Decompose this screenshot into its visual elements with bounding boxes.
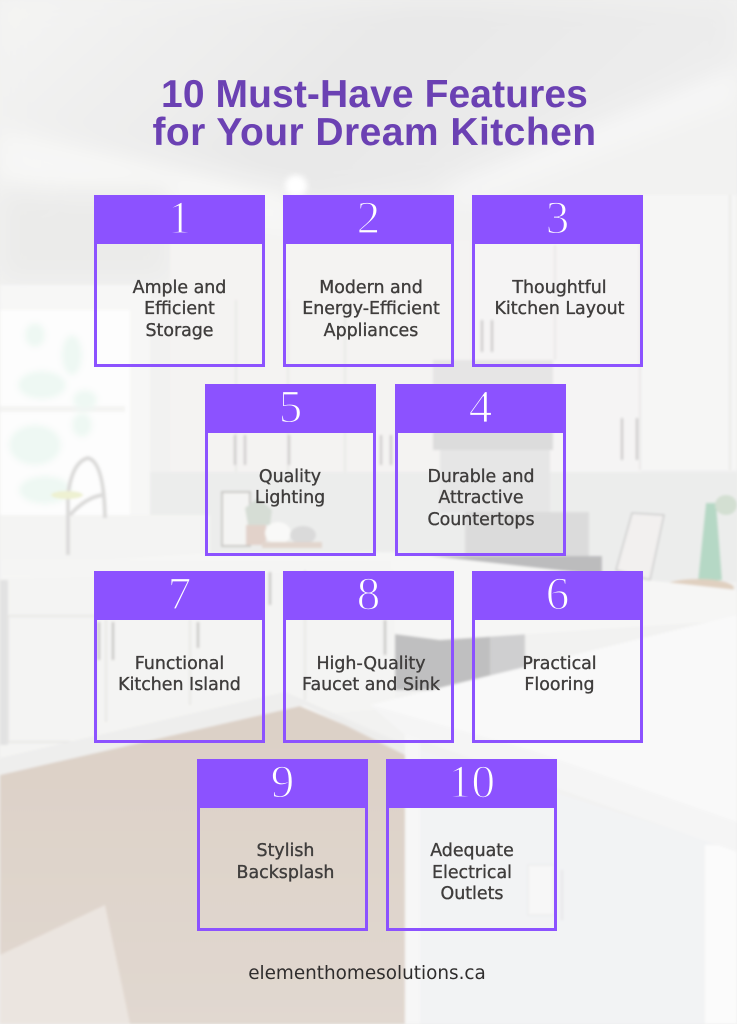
card 4: Durable and Attractive Countertops (395, 384, 566, 556)
card 9: Stylish Backsplash: Backsplash (237, 862, 334, 882)
card 5: Quality Lighting: Lighting (255, 488, 325, 508)
card 3: Thoughtful Kitchen Layout (472, 195, 643, 367)
card 6: Practical Flooring (472, 571, 643, 743)
upper cabinets (170, 240, 470, 472)
card 10: Adequate Electrical Outlets: Outlets (441, 884, 503, 904)
window (0, 285, 150, 550)
card 6: Practical Flooring: Practical (522, 654, 597, 674)
card 3: Thoughtful Kitchen Layout: Kitchen Layout (494, 299, 624, 319)
card 7: Functional Kitchen Island: Functional (135, 654, 224, 674)
card 9: Stylish Backsplash (197, 759, 368, 931)
card 4: Durable and Attractive Countertops: Countertops (427, 510, 535, 530)
card 1: Ample and Efficient Storage: Efficient (144, 299, 215, 319)
card 1: Ample and Efficient Storage (94, 195, 265, 367)
lower counter (0, 552, 737, 640)
card 8: High-Quality Faucet and Sink: High-Quality (316, 654, 426, 674)
card 2: Modern and Energy-Efficient Appliances: Appliances (324, 320, 418, 340)
card 1: Ample and Efficient Storage: 1 (168, 192, 191, 244)
items right (616, 513, 664, 580)
card 10: Adequate Electrical Outlets: 10 (448, 756, 495, 808)
card 3: Thoughtful Kitchen Layout: Thoughtful (512, 278, 607, 298)
card 2: Modern and Energy-Efficient Appliances: Energy-Efficient (302, 299, 440, 319)
faucet (68, 458, 105, 555)
card 4: Durable and Attractive Countertops: Durable and (427, 466, 535, 486)
card 9: Stylish Backsplash: 9 (271, 756, 294, 808)
card 5: Quality Lighting (205, 384, 376, 556)
floor reflection (0, 905, 130, 1024)
card 1: Ample and Efficient Storage: Ample and (133, 278, 226, 298)
card 8: High-Quality Faucet and Sink: Faucet and Sink (302, 675, 440, 695)
card 9: Stylish Backsplash: Stylish (257, 841, 314, 861)
card 2: Modern and Energy-Efficient Appliances (283, 195, 454, 367)
card 10: Adequate Electrical Outlets: Adequate (430, 841, 514, 861)
card 7: Functional Kitchen Island (94, 571, 265, 743)
title: 10 Must-Have Features (161, 73, 588, 116)
footer website: elementhomesolutions.ca (248, 963, 486, 984)
card 6: Practical Flooring: Flooring (524, 675, 595, 695)
card 10: Adequate Electrical Outlets: Electrical (432, 862, 512, 882)
items on counter left (222, 492, 250, 546)
floor (0, 700, 405, 1024)
card 2: Modern and Energy-Efficient Appliances: Modern and (319, 278, 423, 298)
island base (405, 745, 737, 1024)
lower cabinets (0, 570, 395, 760)
card 7: Functional Kitchen Island: 7 (168, 568, 191, 620)
card 8: High-Quality Faucet and Sink: 8 (357, 568, 380, 620)
card 3: Thoughtful Kitchen Layout: 3 (546, 192, 569, 244)
title: for Your Dream Kitchen (152, 111, 597, 154)
backsplash (150, 472, 737, 582)
card 4: Durable and Attractive Countertops: Attractive (438, 488, 524, 508)
card 8: High-Quality Faucet and Sink (283, 571, 454, 743)
card 10: Adequate Electrical Outlets (386, 759, 557, 931)
card 6: Practical Flooring: 6 (546, 568, 569, 620)
title (152, 73, 597, 154)
card 7: Functional Kitchen Island: Kitchen Island (118, 675, 241, 695)
card 2: Modern and Energy-Efficient Appliances: 2 (357, 192, 380, 244)
stove (465, 512, 589, 572)
card 4: Durable and Attractive Countertops: 4 (469, 381, 492, 433)
card 5: Quality Lighting: 5 (279, 381, 302, 433)
card 5: Quality Lighting: Quality (259, 466, 321, 486)
island countertop (370, 615, 737, 822)
card 1: Ample and Efficient Storage: Storage (145, 320, 214, 340)
